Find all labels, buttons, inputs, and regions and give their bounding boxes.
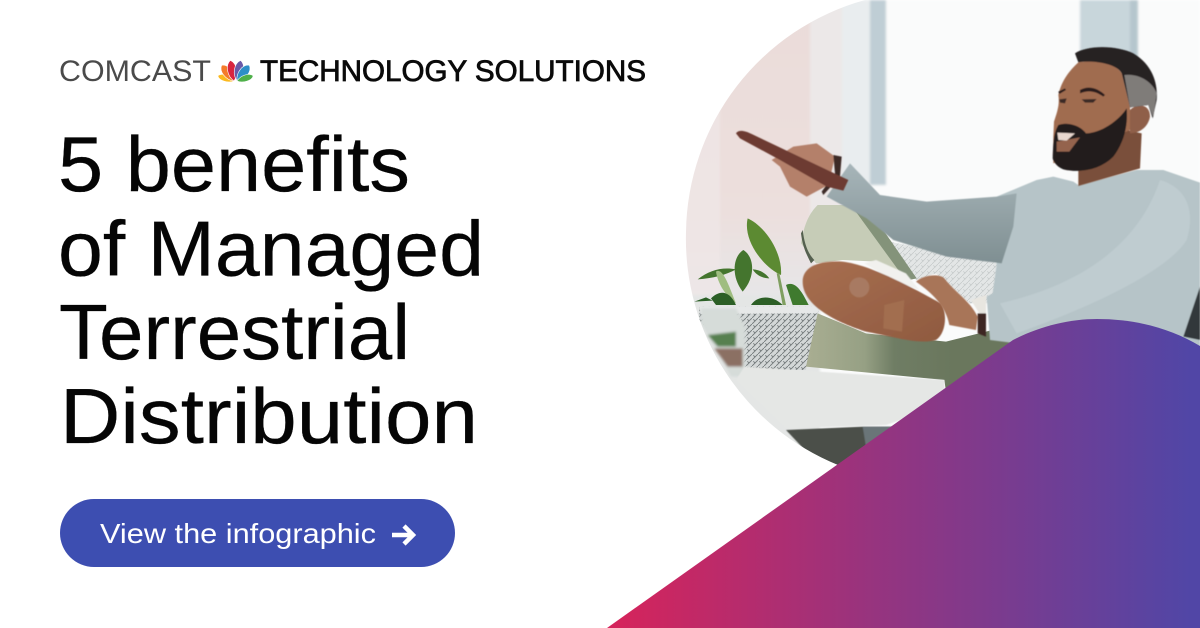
title: 5 benefits [58, 120, 410, 208]
logo: Comcast Technology Solutions [59, 55, 646, 88]
head [1053, 47, 1157, 186]
logo wordmark: Technology Solutions: TECHNOLOGY SOLUTIONS [260, 55, 646, 88]
title [58, 120, 484, 460]
button: view the infographic [60, 499, 455, 567]
left sofa cushion [699, 306, 819, 370]
brows and eyes [1058, 88, 1105, 97]
icon: arrow [392, 526, 413, 544]
icon: NBC peacock [217, 60, 254, 84]
glass jar on table [701, 308, 745, 377]
raised hand, cuff and remote [736, 131, 848, 197]
shoe [803, 260, 945, 342]
hair [1075, 47, 1157, 118]
mouth and chin [1057, 137, 1080, 152]
logo wordmark: Comcast: COMCAST [59, 55, 211, 88]
gradient corner shape [607, 319, 1200, 628]
resting hand and watch [916, 275, 986, 337]
window background [686, 0, 1140, 447]
ear [1130, 106, 1150, 133]
sweater [827, 163, 1200, 350]
button label: View the infographic [100, 518, 376, 549]
beard [1053, 108, 1127, 171]
plant [694, 218, 809, 305]
neck [1078, 130, 1142, 186]
photo: man pointing a remote at the TV from a sofa [686, 0, 1200, 465]
title: Distribution [60, 372, 478, 460]
sofa back [889, 242, 1006, 303]
title: of Managed [58, 204, 484, 292]
face [1053, 61, 1130, 163]
remote control [736, 131, 848, 191]
coffee table [736, 367, 944, 468]
title: Terrestrial [59, 288, 410, 376]
trousers [801, 205, 1010, 388]
